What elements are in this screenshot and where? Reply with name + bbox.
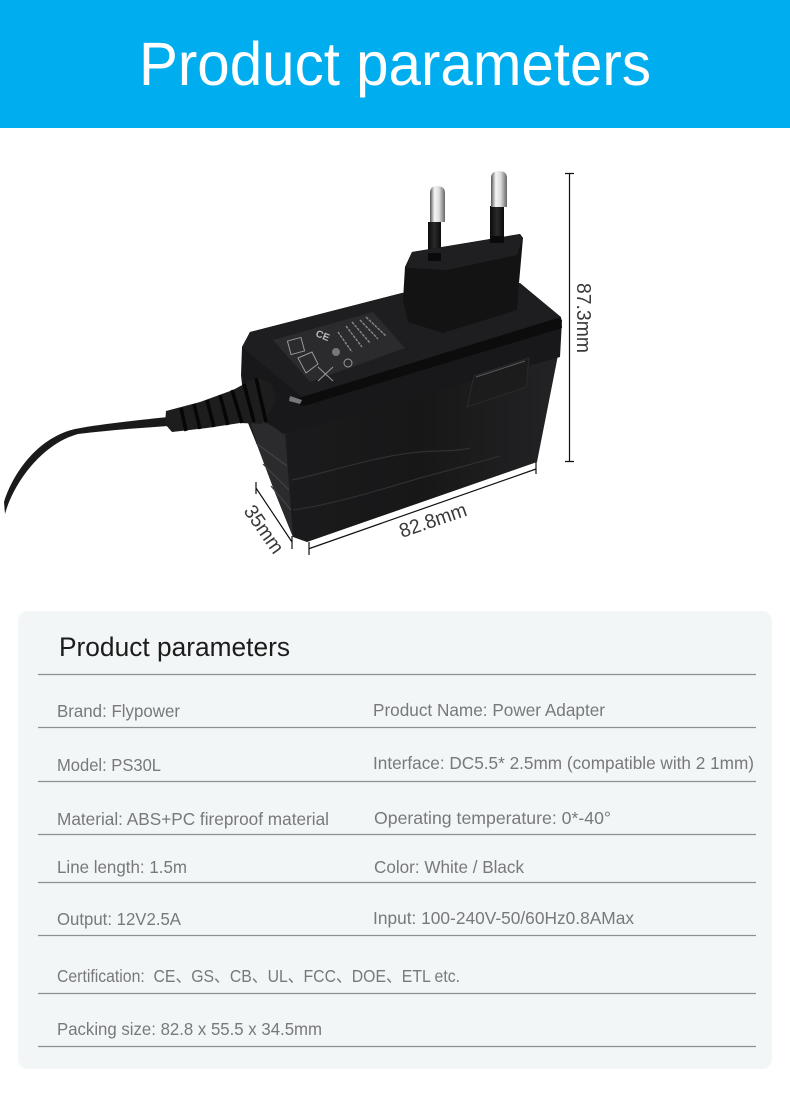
title: Product parameters xyxy=(139,30,651,98)
left face of body xyxy=(248,415,293,537)
row: certification: Certification: CE、GS、CB、UL、FCC、DOE、ETL etc. xyxy=(57,966,460,986)
adapter upper shell xyxy=(241,283,562,434)
dimension: depth 35mm: 35mm xyxy=(239,501,288,558)
panel: product parameters table xyxy=(18,611,772,1069)
side latch xyxy=(467,358,529,407)
row: model and interface: Interface: DC5.5* 2.5mm (compatible with 2 1mm) xyxy=(373,753,754,773)
strain relief xyxy=(165,377,276,432)
dimension: height 87.3mm xyxy=(565,173,594,462)
dimension: depth 35mm xyxy=(239,482,292,558)
row: model and interface: Model: PS30L xyxy=(57,755,161,775)
adapter lower body xyxy=(244,345,560,542)
row: output and input xyxy=(57,908,634,929)
row: brand and product name: Product Name: Power Adapter xyxy=(373,700,605,720)
cable xyxy=(4,417,168,514)
dimension: height 87.3mm: 87.3mm xyxy=(572,283,594,353)
row: output and input: Output: 12V2.5A xyxy=(57,909,181,929)
top face xyxy=(242,283,561,397)
row: packing size: Packing size: 82.8 x 55.5 x 34.5mm xyxy=(57,1019,322,1039)
dimension: length 82.8mm: 82.8mm xyxy=(396,499,470,543)
row: line length and color: Line length: 1.5m xyxy=(57,857,187,877)
row: output and input: Input: 100-240V-50/60Hz0.8AMax xyxy=(373,908,634,928)
row: brand and product name: Brand: Flypower xyxy=(57,701,180,721)
row: material and operating temperature: Operating temperature: 0*-40° xyxy=(374,808,611,828)
row: material and operating temperature xyxy=(57,808,611,829)
row: line length and color xyxy=(57,857,524,877)
euro plug xyxy=(403,234,523,333)
rating label: CE xyxy=(314,329,331,344)
header banner xyxy=(0,0,790,128)
row: model and interface xyxy=(57,753,754,775)
row: line length and color: Color: White / Black xyxy=(374,857,524,877)
row: brand and product name xyxy=(57,700,605,721)
table heading: Product parameters xyxy=(59,632,290,662)
dimension: length 82.8mm xyxy=(309,462,536,555)
row: material and operating temperature: Material: ABS+PC fireproof material xyxy=(57,809,329,829)
power adapter product illustration xyxy=(4,171,562,542)
rating label xyxy=(273,312,405,382)
plug pins xyxy=(428,171,507,262)
